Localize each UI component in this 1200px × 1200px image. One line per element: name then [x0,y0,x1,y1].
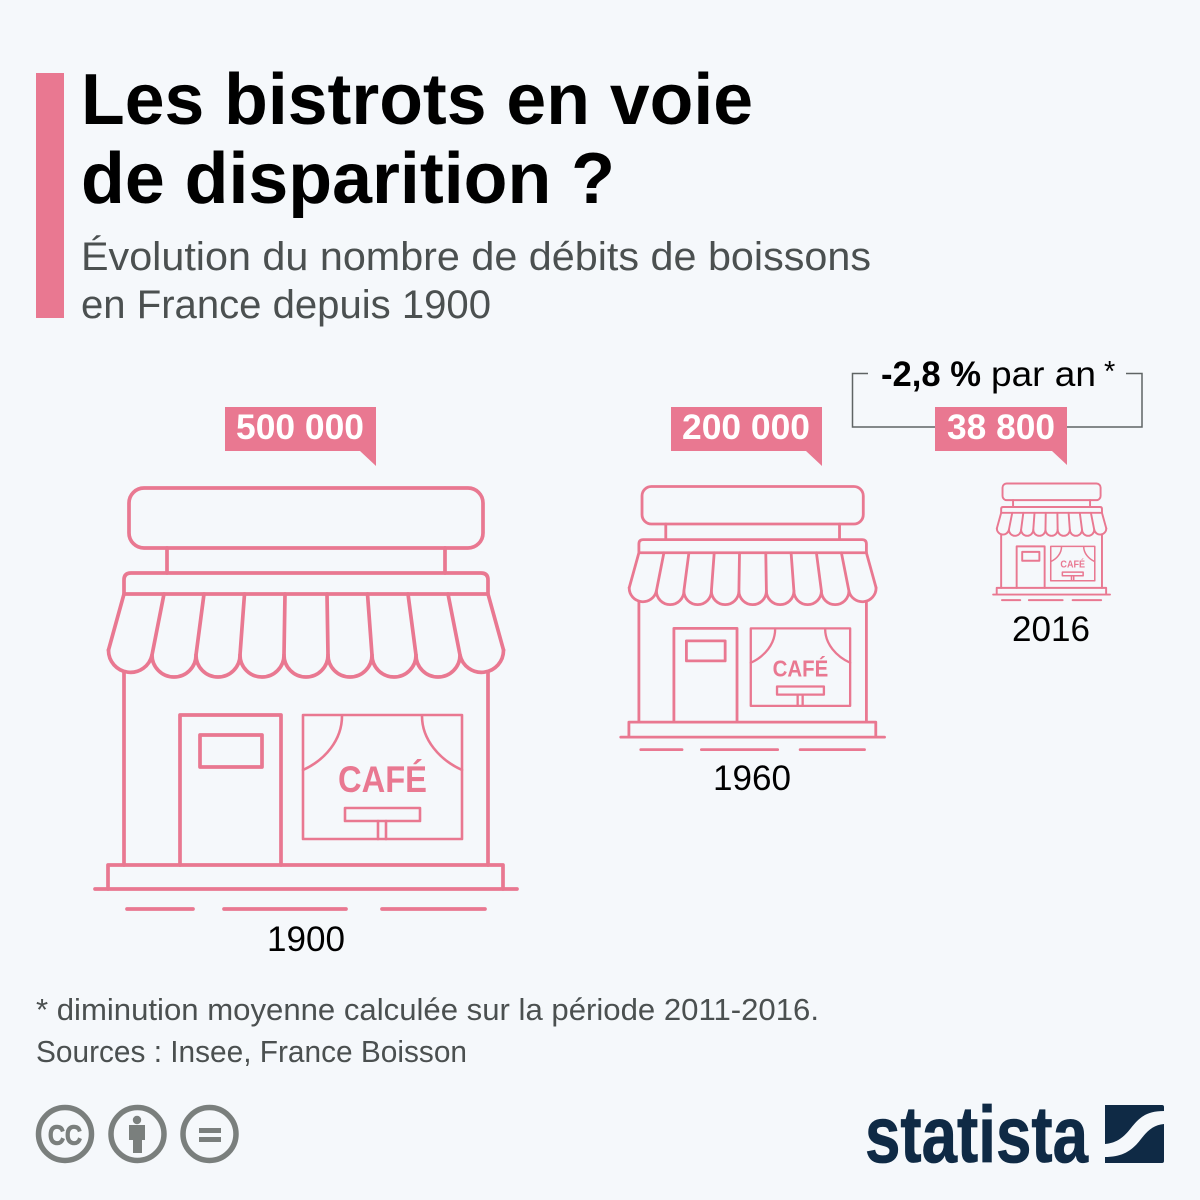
value flag: 38 800 [935,407,1067,465]
icon: creative commons: CC [48,1120,82,1150]
icon: creative commons [38,1108,92,1160]
year label 1900: 1900 [267,920,345,959]
year label 1960: 1960 [713,759,791,798]
title [81,60,753,219]
icon: cafe 1960 [621,486,885,750]
icon: cafe 1960: CAFÉ [773,654,828,681]
value flag: 38 800: 38 800 [947,408,1055,447]
rate label: -2,8 % [881,355,981,394]
title: Les bistrots en voie [81,60,753,140]
subtitle: Évolution du nombre de débits de boissons [81,234,871,279]
rate label: * [1104,356,1115,388]
icon: cafe 1900 [95,488,517,909]
subtitle: en France depuis 1900 [81,283,491,327]
title: de disparition ? [81,139,615,219]
value flag: 500 000: 500 000 [236,408,364,447]
footnote and sources: Sources : Insee, France Boisson [36,1034,467,1069]
value flag: 200 000 [671,407,822,466]
accent bar [36,73,64,318]
rate label [881,355,1115,394]
value flag: 500 000 [225,407,376,466]
rate label: par an [991,355,1096,394]
footnote and sources: * diminution moyenne calculée sur la période 2011-2016. [36,992,819,1027]
year label 2016: 2016 [1012,610,1090,649]
subtitle [81,234,871,327]
footnote and sources [36,992,819,1069]
icon: cafe 2016: CAFÉ [1060,558,1085,571]
statista logo: statista [865,1090,1088,1179]
icon: cafe 1900: CAFÉ [338,759,427,800]
rate bracket [852,374,1142,427]
icon: cafe 2016 [993,483,1110,600]
icon: no derivatives [183,1108,236,1160]
icon: attribution [111,1108,164,1160]
value flag: 200 000: 200 000 [682,408,810,447]
